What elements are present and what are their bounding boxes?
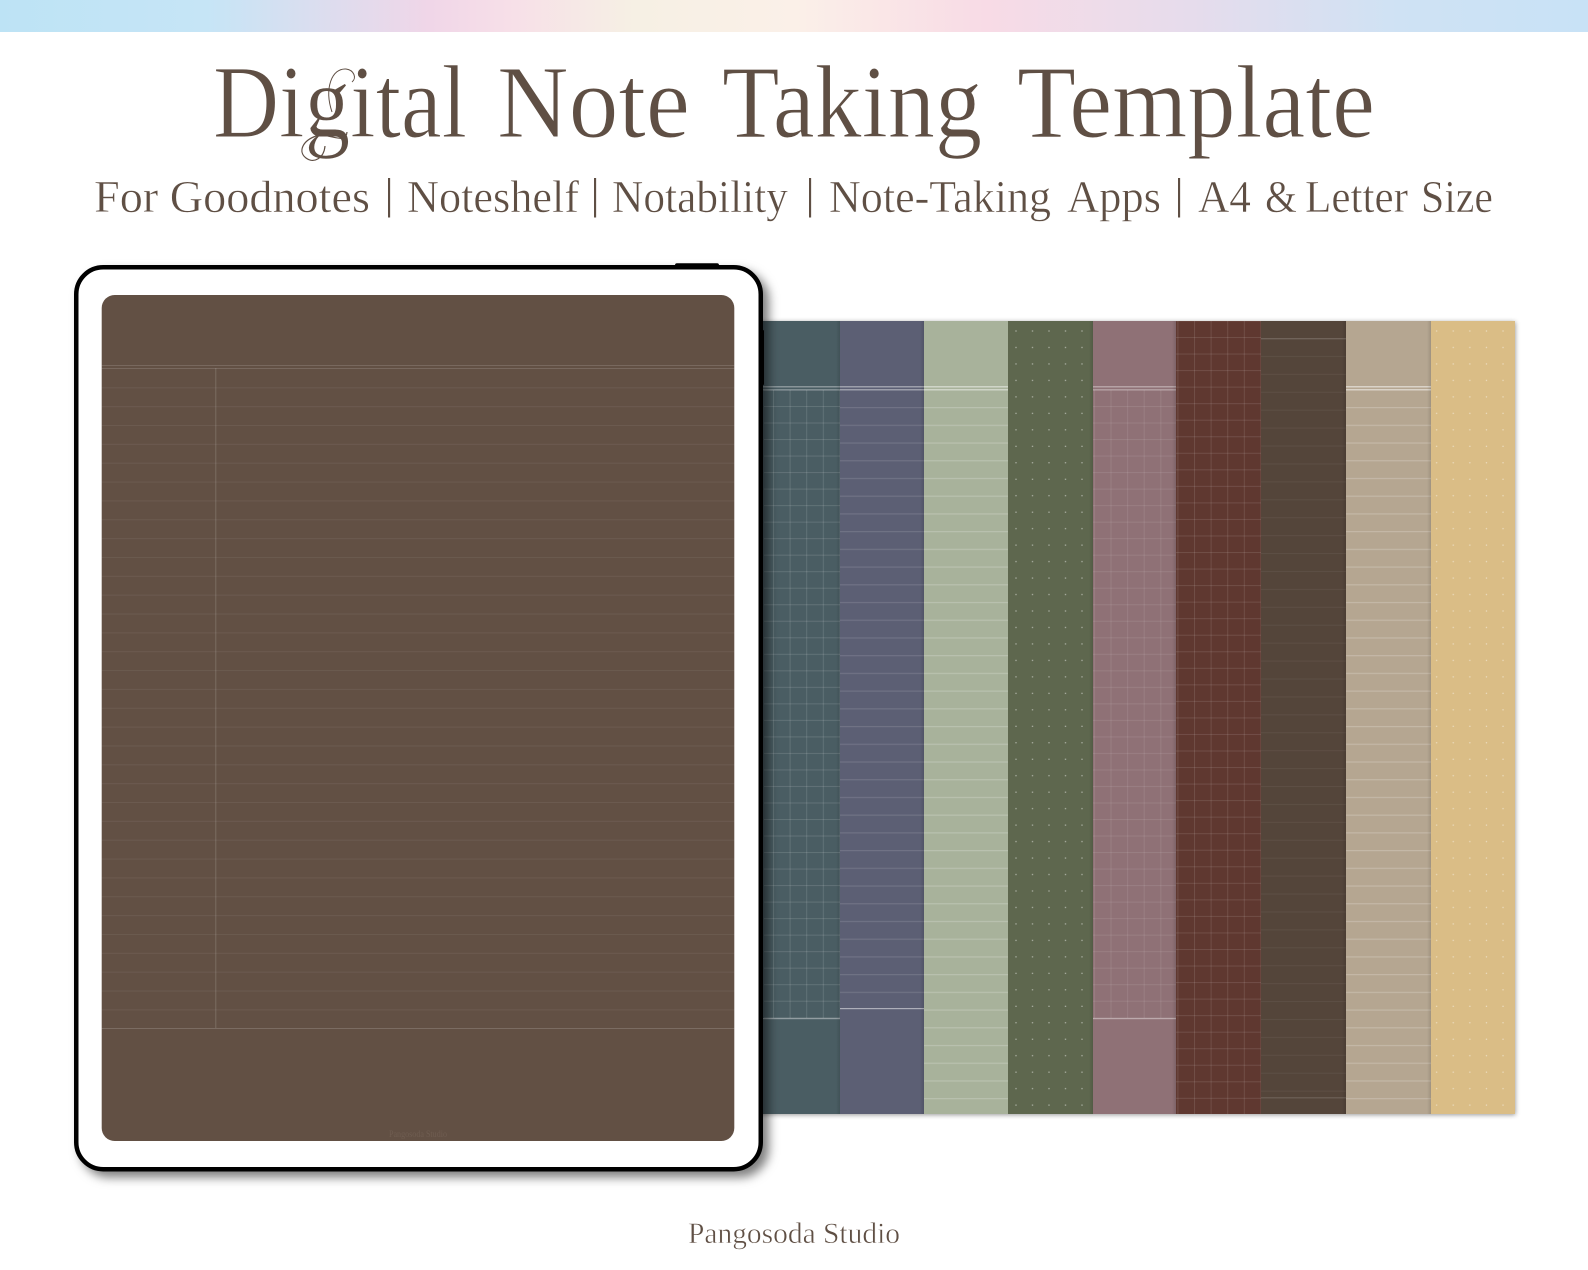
faint screen watermark: Pangosoda Studio bbox=[389, 1129, 447, 1139]
panel: fanned paper strips bbox=[755, 321, 1515, 1114]
strip: dark brown lined paper bbox=[1261, 321, 1346, 1114]
footer studio name: Pangosoda Studio bbox=[688, 1217, 900, 1250]
strip: maroon grid paper bbox=[1176, 321, 1261, 1114]
subtitle: Notability bbox=[612, 171, 788, 222]
tablet side button bbox=[761, 330, 764, 385]
title: Digital bbox=[213, 45, 467, 160]
tablet top button bbox=[675, 263, 719, 268]
subtitle: Letter bbox=[1305, 171, 1408, 222]
strip: sage lined paper bbox=[924, 321, 1008, 1114]
subtitle: A4 bbox=[1198, 171, 1251, 222]
strip: tan lined paper bbox=[1346, 321, 1431, 1114]
tablet screen: brown lined note page bbox=[102, 295, 734, 1141]
strip: mauve grid paper bbox=[1093, 321, 1176, 1114]
subtitle: | bbox=[1175, 171, 1183, 218]
tablet body bbox=[76, 267, 761, 1169]
strip: teal grid paper bbox=[755, 321, 840, 1114]
strip: slate purple lined paper bbox=[840, 321, 924, 1114]
title: Taking bbox=[722, 45, 982, 160]
subtitle: Size bbox=[1421, 171, 1493, 222]
subtitle: | bbox=[806, 171, 814, 218]
subtitle: Note-Taking bbox=[829, 171, 1051, 222]
title bbox=[213, 45, 1375, 160]
gradient header bar bbox=[0, 0, 1588, 32]
strip: olive dotted paper bbox=[1008, 321, 1093, 1114]
subtitle: Apps bbox=[1067, 171, 1161, 222]
title: Template bbox=[1017, 45, 1375, 160]
strip: honey dotted paper bbox=[1431, 321, 1515, 1114]
tablet device bbox=[76, 263, 764, 1169]
title: Note bbox=[497, 45, 690, 160]
subtitle bbox=[94, 171, 1493, 222]
subtitle: | bbox=[385, 171, 393, 218]
subtitle: For Goodnotes bbox=[94, 171, 370, 222]
flourish on the g of Digital bbox=[302, 69, 354, 160]
subtitle: & bbox=[1265, 171, 1297, 222]
subtitle: Noteshelf bbox=[407, 171, 580, 222]
subtitle: | bbox=[591, 171, 599, 218]
